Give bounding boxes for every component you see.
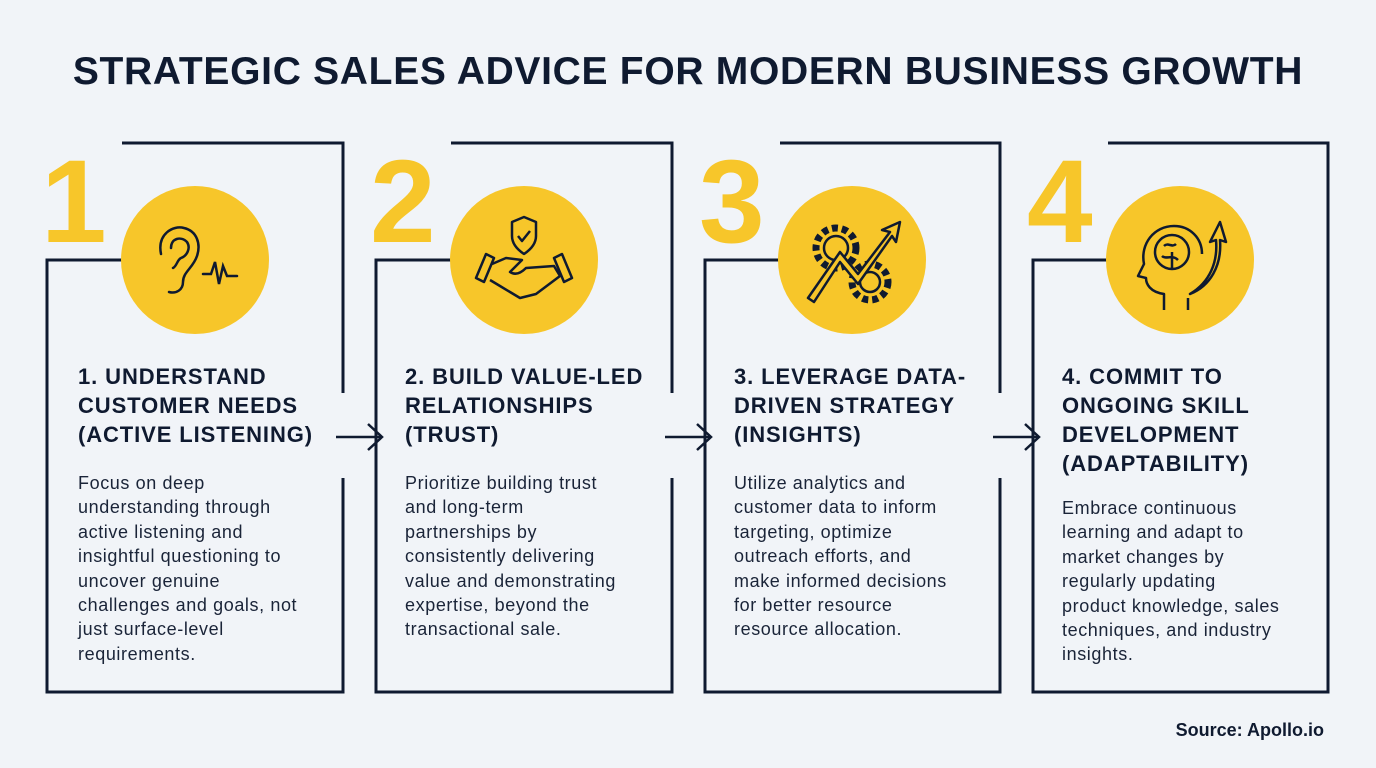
body 4: market changes by	[1062, 547, 1224, 567]
title: STRATEGIC SALES ADVICE FOR MODERN BUSINESS GROWTH	[73, 50, 1303, 93]
body 3: for better resource	[734, 595, 892, 615]
body 3	[734, 473, 947, 639]
arrows	[336, 424, 1039, 450]
panel 1	[41, 136, 313, 664]
source: Source: Apollo.io	[1176, 720, 1324, 740]
body 2: transactional sale.	[405, 619, 561, 639]
number 3: 3	[699, 136, 765, 268]
body 4: Embrace continuous	[1062, 498, 1237, 518]
body 1: just surface-level	[78, 619, 224, 639]
body 2	[405, 473, 616, 639]
number 2: 2	[370, 136, 436, 268]
body 1	[78, 473, 297, 664]
body 3: customer data to inform	[734, 497, 937, 517]
panel 3	[699, 136, 966, 639]
icon: gears growth	[778, 186, 926, 334]
body 1: challenges and goals, not	[78, 595, 297, 615]
number 1: 1	[41, 136, 107, 268]
icon: head brain arrow	[1106, 186, 1254, 334]
body 1: active listening and	[78, 522, 243, 542]
body 1: insightful questioning to	[78, 546, 281, 566]
body 4: learning and adapt to	[1062, 522, 1244, 542]
body 4: insights.	[1062, 644, 1133, 664]
body 2: value and demonstrating	[405, 571, 616, 591]
icon: handshake shield	[450, 186, 598, 334]
body 4: regularly updating	[1062, 571, 1216, 591]
body 1: uncover genuine	[78, 571, 220, 591]
heading 1: 1. UNDERSTAND CUSTOMER NEEDS (ACTIVE LISTENING)	[78, 364, 313, 447]
body 4	[1062, 498, 1280, 664]
body 1: Focus on deep	[78, 473, 205, 493]
heading 4: 4. COMMIT TO ONGOING SKILL DEVELOPMENT (ADAPTABILITY)	[1062, 364, 1249, 476]
body 2: and long-term	[405, 497, 524, 517]
panel 4	[1027, 136, 1280, 664]
body 4: techniques, and industry	[1062, 620, 1272, 640]
body 3: Utilize analytics and	[734, 473, 906, 493]
heading 3: 3. LEVERAGE DATA-DRIVEN STRATEGY (INSIGHTS)	[734, 364, 966, 447]
body 1: requirements.	[78, 644, 196, 664]
body 2: expertise, beyond the	[405, 595, 590, 615]
heading 2: 2. BUILD VALUE-LED RELATIONSHIPS (TRUST)	[405, 364, 643, 447]
number 4: 4	[1027, 136, 1093, 268]
body 2: consistently delivering	[405, 546, 595, 566]
body 2: Prioritize building trust	[405, 473, 597, 493]
body 1: understanding through	[78, 497, 271, 517]
panel 2	[370, 136, 643, 639]
body 3: targeting, optimize	[734, 522, 892, 542]
body 4: product knowledge, sales	[1062, 596, 1280, 616]
body 3: make informed decisions	[734, 571, 947, 591]
body 2: partnerships by	[405, 522, 537, 542]
icon: ear	[121, 186, 269, 334]
body 3: resource allocation.	[734, 619, 902, 639]
body 3: outreach efforts, and	[734, 546, 911, 566]
